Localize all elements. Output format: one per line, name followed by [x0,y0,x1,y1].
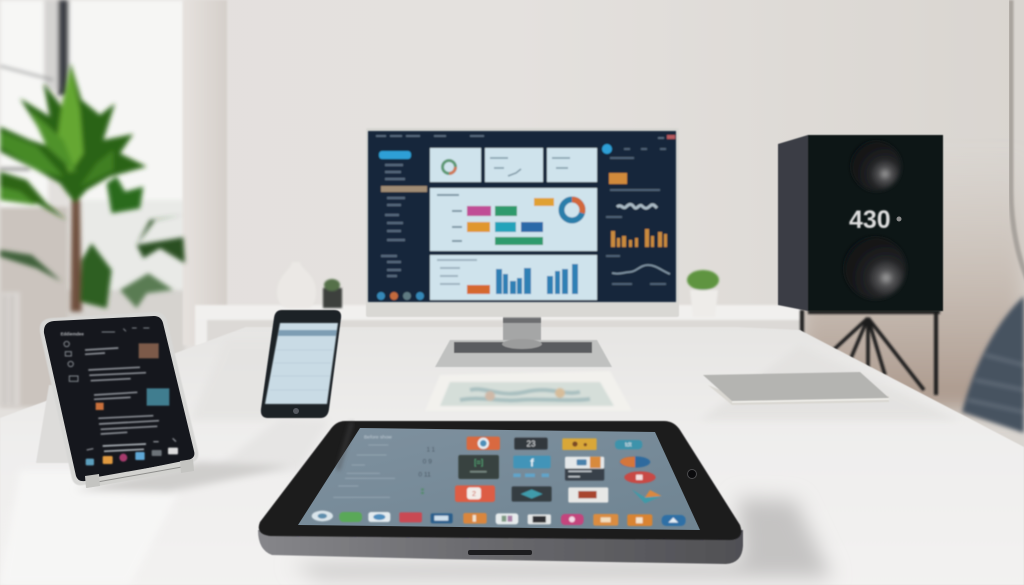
phone [200,310,341,480]
monitor [366,128,679,367]
top menu bar [376,136,664,138]
phone button [293,408,299,414]
right cluster [107,177,143,213]
wall cable [1011,0,1024,285]
left lower frond [0,172,67,220]
list text: 0 9 [423,458,432,465]
bezel glare [338,422,352,470]
tablet screen content [312,434,686,526]
tablet shadow [290,498,832,578]
app row one: tdt [625,443,632,449]
radiator [0,292,20,407]
lower fronds [0,250,62,282]
tablet silver edge [258,530,743,564]
window and curtain [0,0,185,407]
left tablet on stand [36,312,290,492]
table surface [0,327,1024,585]
tablet content: Eddiemdee [61,331,84,336]
tablet bezel [259,421,741,540]
list text: Before show [364,434,392,440]
app row three: 2 [472,489,476,498]
app row two: f [530,458,534,470]
monitor screen [368,131,676,302]
speaker cabinet [778,135,943,311]
app row one [467,437,642,450]
main tablet [258,421,832,578]
phone screen [265,323,338,404]
office chair [962,296,1024,433]
tablet content [61,328,178,465]
monitor stand [435,316,612,367]
speaker number: 430 [849,206,891,234]
left sidebar [377,151,427,300]
right frond [137,215,185,263]
camera [688,470,696,478]
white stand [36,385,70,463]
tablet screen [298,428,700,530]
charging port [468,550,532,555]
app row two [458,455,656,483]
bottom bar chart panel [430,255,597,300]
app row three [421,485,662,503]
small green plant in white pot [687,270,719,317]
wall column [183,0,227,345]
closed laptop slab [703,372,889,405]
phone body [261,310,341,418]
middle chart panel [430,188,597,251]
upper crown [0,63,147,203]
speaker stand [802,310,940,395]
list text: 0 11 [418,472,431,479]
paper map on table [425,371,632,411]
app dock [312,511,686,526]
tablet screen [44,316,194,481]
back shelf [195,305,801,346]
top stat cards [430,148,597,182]
speaker on stand [778,135,943,395]
tablet clip [85,459,194,488]
vase [277,262,316,308]
table reflections [0,340,960,585]
right activity column [602,144,670,284]
plant [0,63,185,312]
speaker drivers [844,141,906,299]
app row three: ⁑ [421,488,425,497]
app row one: 23 [527,439,536,448]
monitor frame [366,128,679,317]
tablet body [40,312,198,485]
list text: 1 1 [427,448,436,454]
tablet shadow [75,462,290,492]
app row two: [=] [474,458,483,467]
small dark pot with plant [323,279,342,308]
list text [333,434,436,497]
